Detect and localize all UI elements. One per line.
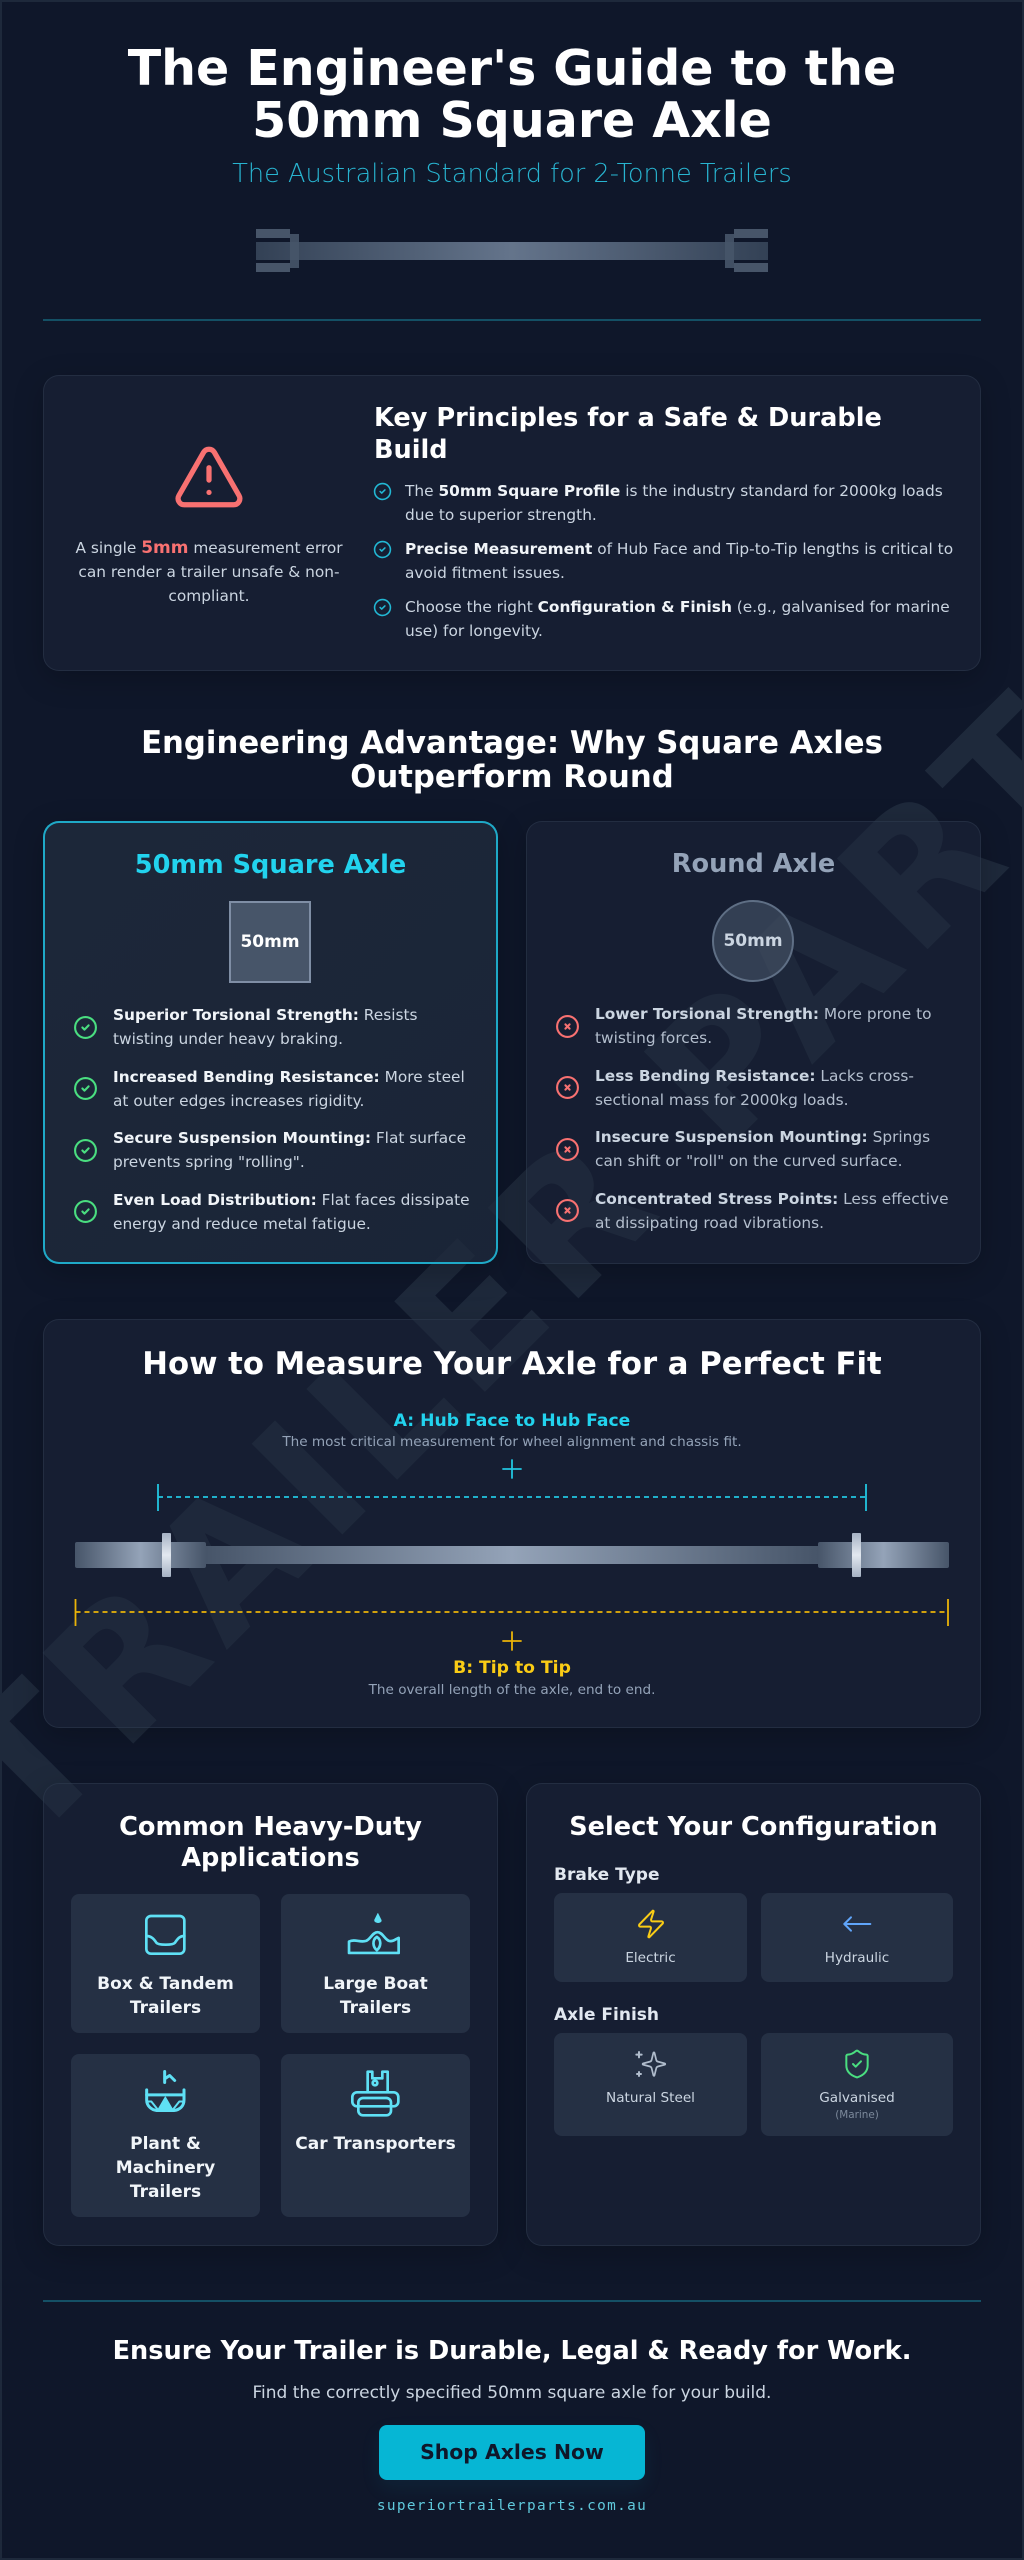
label [97,1974,234,2018]
drawback 3: can shift or "roll" on the curved surface. [595,1152,902,1170]
sublabel: (Marine) [835,2109,879,2121]
panel: round axle [526,821,981,1264]
label: Machinery [116,2158,215,2178]
label: Plant & [130,2134,201,2154]
heading [119,1812,422,1872]
label: Trailers [130,2182,201,2202]
principle 2: Precise Measurement of Hub Face and Tip-to-Tip lengths is critical to [405,540,953,558]
warning text: can render a trailer unsafe & non- [78,563,340,581]
icon: sparkles [635,2051,666,2077]
icon: warning triangle [175,446,242,508]
principle 3 [374,598,950,640]
icon: boat [348,1913,400,1954]
warning text: compliant. [168,587,250,605]
advantage 2: at outer edges increases rigidity. [113,1092,364,1110]
drawback 3 [556,1128,930,1170]
label [116,2134,215,2202]
square profile: 50mm [240,932,300,952]
panel: applications [43,1783,498,2246]
dimension line A [157,1459,867,1511]
heading: Round Axle [672,849,835,879]
drawback 2: sectional mass for 2000kg loads. [595,1090,848,1108]
advantage 2: Increased Bending Resistance: More steel [113,1068,465,1086]
square profile [229,901,311,983]
title: 50mm Square Axle [252,92,772,148]
heading: 50mm Square Axle [135,850,406,880]
drawback 2 [556,1066,914,1108]
advantage 3: Secure Suspension Mounting: Flat surface [113,1129,466,1147]
label [323,1974,428,2018]
description A: The most critical measurement for wheel alignment and chassis fit. [282,1434,742,1450]
footer heading: Ensure Your Trailer is Durable, Legal & Ready for Work. [113,2336,911,2366]
label: Natural Steel [606,2090,695,2106]
option: electric [554,1893,747,1982]
label: Box & Tandem [97,1974,234,1994]
section heading: engineering advantage: Engineering Advantage: Why Square Axles [141,724,883,760]
heading: Build [374,434,448,464]
heading: Applications [181,1842,360,1872]
principle 3: use) for longevity. [405,622,543,640]
drawback 4: at dissipating road vibrations. [595,1214,824,1232]
label A: A: Hub Face to Hub Face [394,1411,630,1431]
card: large boat trailers [281,1894,470,2033]
drawback 2: Less Bending Resistance: Lacks cross- [595,1066,914,1084]
divider [43,2300,981,2302]
heading [374,403,882,464]
card: box and tandem trailers [71,1894,260,2033]
label B: B: Tip to Tip [453,1658,571,1678]
card: plant and machinery trailers [71,2054,260,2217]
icon: lightning [638,1910,664,1938]
icon: box trailer [145,1914,186,1955]
round profile [712,900,794,982]
heading: Common Heavy-Duty [119,1812,422,1842]
heading: Key Principles for a Safe & Durable [374,403,882,433]
label: Electric [625,1950,676,1966]
drawback 1: twisting forces. [595,1029,712,1047]
drawback 4 [556,1190,949,1232]
icon: arrow [843,1916,872,1932]
subheading: axle finish: Axle Finish [554,2005,659,2025]
principle 2 [374,540,953,582]
advantage 1: twisting under heavy braking. [113,1030,343,1048]
dimension line B [74,1599,949,1651]
footer text: Find the correctly specified 50mm square axle for your build. [253,2383,771,2403]
divider [43,319,981,321]
principle 1: due to superior strength. [405,506,597,524]
icon: header axle [256,229,768,272]
card: car transporters [281,2054,470,2217]
advantage 1 [74,1006,418,1048]
advantage 2 [74,1068,465,1110]
panel: how to measure [43,1319,981,1728]
panel: configuration [526,1783,981,2246]
principle 3: Choose the right Configuration & Finish (e.g., galvanised for marine [405,598,950,616]
advantage 3: prevents spring "rolling". [113,1153,305,1171]
option: natural steel [554,2033,747,2136]
label: Trailers [340,1998,411,2018]
subtitle: The Australian Standard for 2-Tonne Trailers [232,159,792,189]
icon: shield check [845,2050,869,2078]
label: Galvanised [819,2090,895,2106]
subheading: brake type: Brake Type [554,1865,659,1885]
button: shop axles now [379,2425,645,2480]
advantage 4 [74,1190,470,1232]
icon: machinery [145,2070,186,2112]
principle 1 [374,482,943,524]
advantage 4: Even Load Distribution: Flat faces dissipate [113,1190,470,1208]
option: hydraulic [761,1893,953,1982]
axle diagram [75,1533,949,1577]
drawback 1: Lower Torsional Strength: More prone to [595,1005,932,1023]
label: Car Transporters [295,2134,456,2154]
warning text [75,538,343,605]
warning text: A single 5mm measurement error [75,538,343,558]
heading: Select Your Configuration [569,1812,938,1842]
drawback 1 [556,1005,932,1047]
principle 2: avoid fitment issues. [405,564,565,582]
round profile: 50mm [723,931,783,951]
advantage 4: energy and reduce metal fatigue. [113,1214,371,1232]
label: Large Boat [323,1974,428,1994]
section heading: engineering advantage: Outperform Round [350,758,674,794]
label: Hydraulic [825,1950,889,1966]
title [128,40,896,148]
panel: key principles [43,375,981,671]
panel: square axle [43,821,498,1264]
website: superiortrailerparts.com.au [377,2498,647,2514]
advantage 1: Superior Torsional Strength: Resists [113,1006,418,1024]
drawback 4: Concentrated Stress Points: Less effective [595,1190,949,1208]
drawback 3: Insecure Suspension Mounting: Springs [595,1128,930,1146]
title: The Engineer's Guide to the [128,40,896,97]
option: galvanised [761,2033,953,2136]
section heading: engineering advantage [141,724,883,794]
icon: car transporter [351,2070,400,2117]
button: shop axles now: Shop Axles Now [420,2440,604,2464]
heading: How to Measure Your Axle for a Perfect Fit [142,1346,882,1382]
principle 1: The 50mm Square Profile is the industry standard for 2000kg loads [405,482,943,500]
advantage 3 [74,1129,466,1171]
label: Trailers [130,1998,201,2018]
description B: The overall length of the axle, end to end. [369,1682,655,1698]
